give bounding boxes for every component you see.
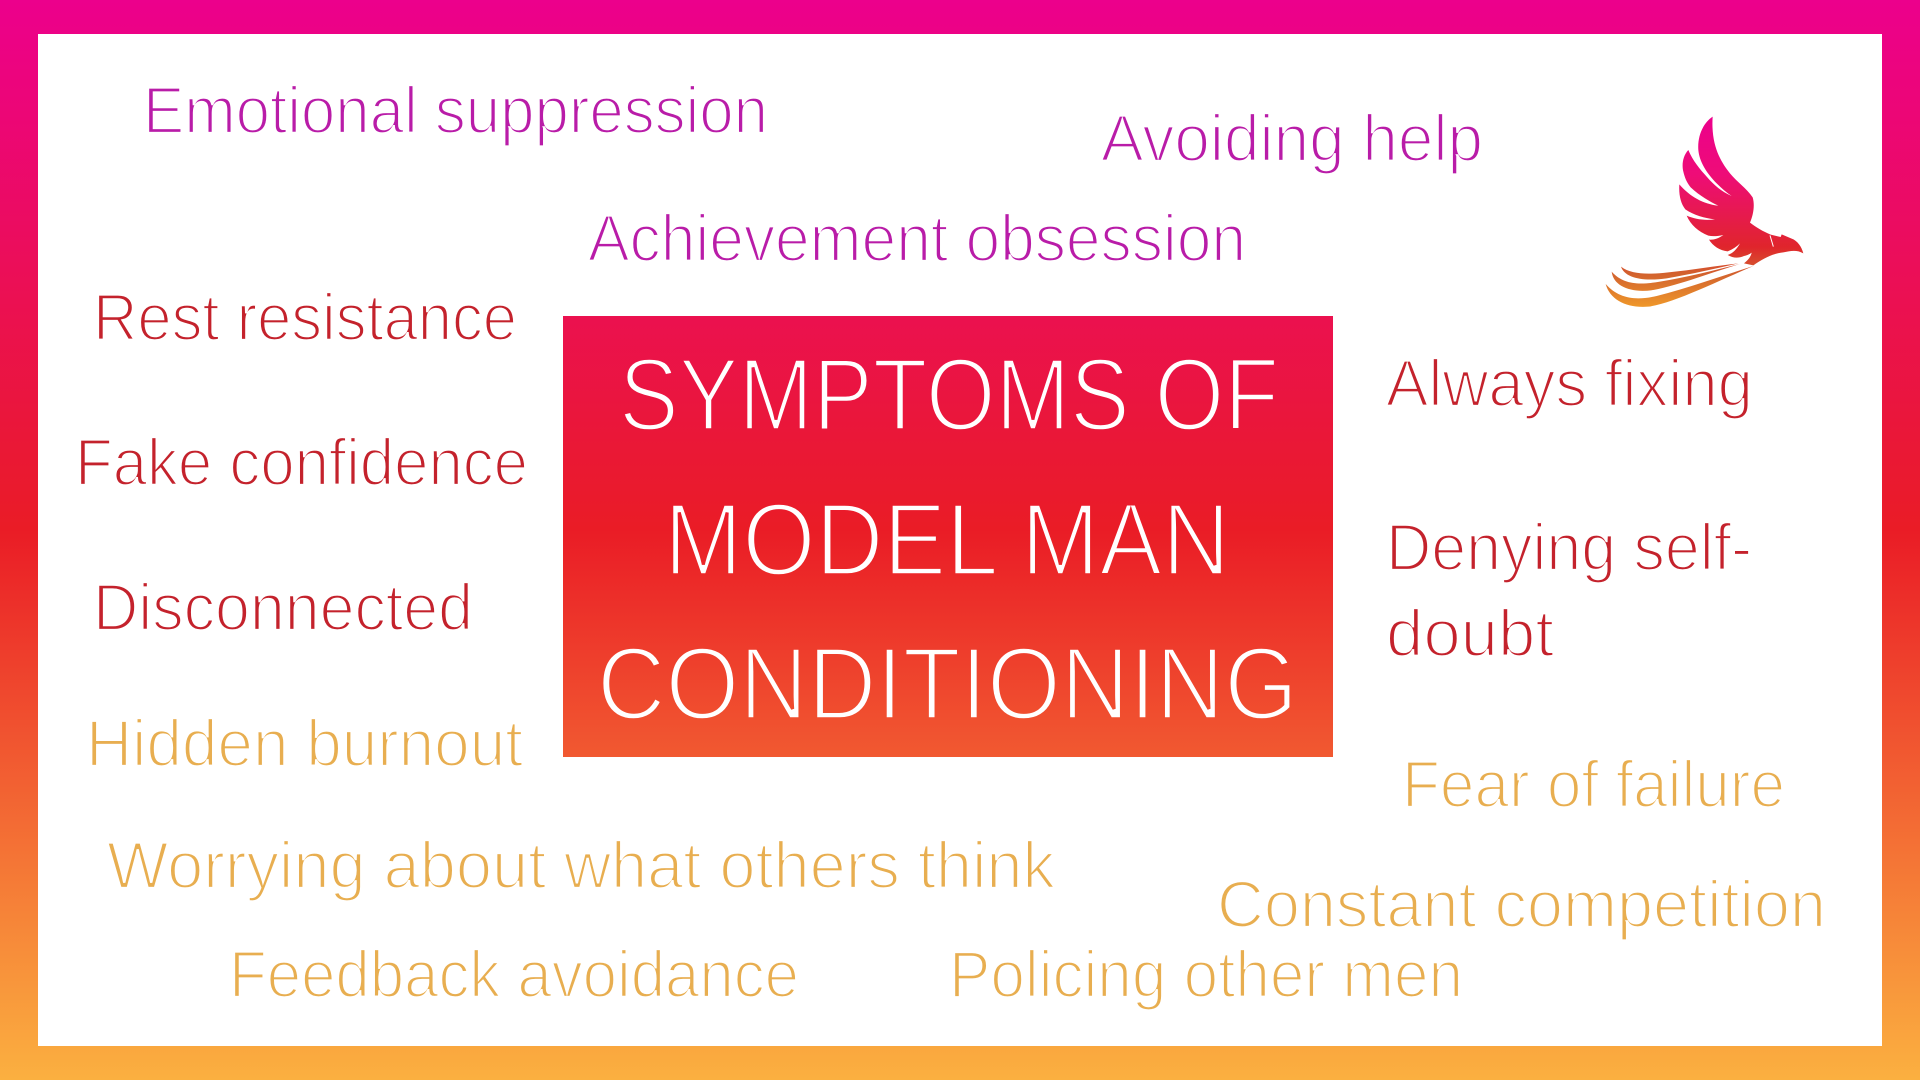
symptom: Feedback avoidance: Feedback avoidance <box>229 937 799 1011</box>
symptom: Fear of failure: Fear of failure <box>1402 747 1785 821</box>
symptom: Avoiding help: Avoiding help <box>1101 101 1483 175</box>
symptom: Rest resistance: Rest resistance <box>93 280 517 354</box>
symptom: Denying self-doubt: Denying self- <box>1386 510 1752 584</box>
symptom: Always fixing: Always fixing <box>1386 346 1753 420</box>
symptom: Policing other men: Policing other men <box>949 937 1463 1011</box>
icon: phoenix logo <box>1606 117 1803 307</box>
title: SYMPTOMS OF <box>619 337 1279 452</box>
symptom: Disconnected: Disconnected <box>93 570 473 644</box>
symptom: Emotional suppression: Emotional suppression <box>143 73 768 147</box>
symptom: Worrying about what others think: Worrying about what others think <box>107 828 1056 902</box>
central title box <box>563 316 1333 757</box>
title: MODEL MAN <box>664 482 1230 597</box>
symptom: Constant competition: Constant competition <box>1217 867 1826 941</box>
symptom: Denying self-doubt: doubt <box>1386 596 1554 670</box>
symptom: Achievement obsession: Achievement obsession <box>588 201 1246 275</box>
symptom: Hidden burnout: Hidden burnout <box>86 706 523 780</box>
symptom: Fake confidence: Fake confidence <box>75 425 528 499</box>
title: CONDITIONING <box>597 626 1298 741</box>
symptom: Denying self-doubt <box>1386 510 1752 670</box>
title <box>597 337 1298 741</box>
